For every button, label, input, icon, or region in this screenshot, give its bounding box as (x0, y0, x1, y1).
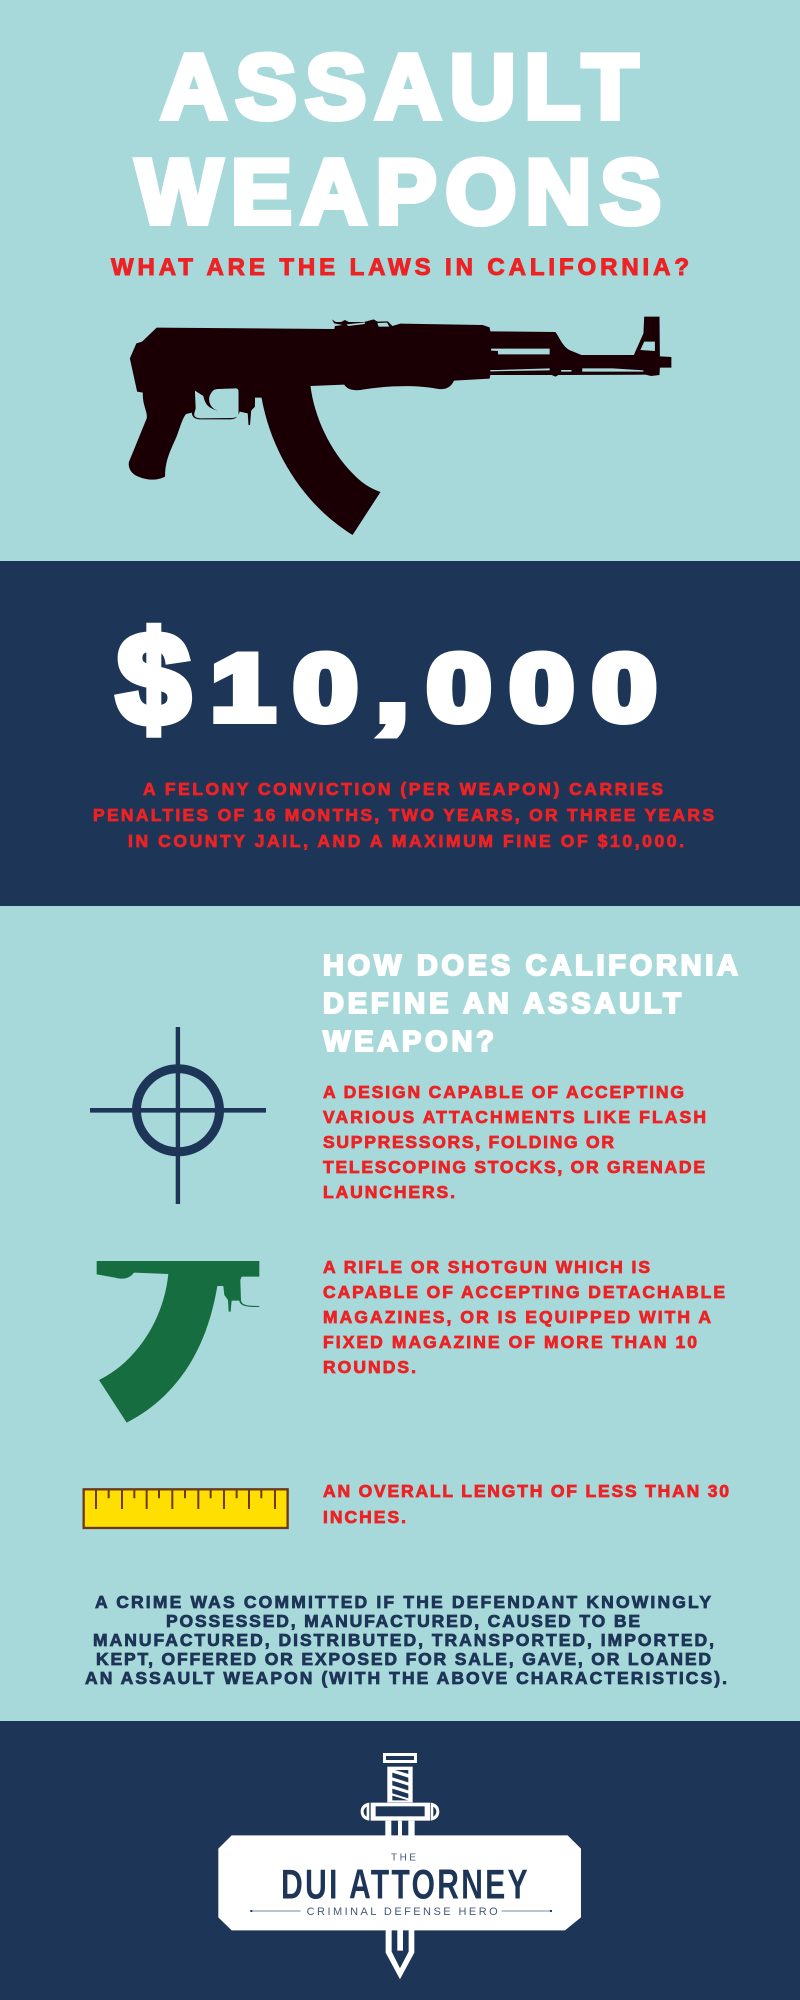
icon: sword blade tip (386, 1929, 414, 1979)
fine description: IN COUNTY JAIL, AND A MAXIMUM FINE OF $10,000. (128, 831, 684, 851)
text: attachments (323, 1082, 706, 1202)
text: attachments: LAUNCHERS. (323, 1182, 455, 1202)
fine description: PENALTIES OF 16 MONTHS, TWO YEARS, OR THREE YEARS (93, 805, 714, 825)
icon: sword hilt (361, 1753, 439, 1837)
section heading: WEAPON? (323, 1026, 494, 1058)
big number: $ (117, 605, 190, 752)
text: attachments: SUPPRESSORS, FOLDING OR (323, 1132, 614, 1152)
text: length: AN OVERALL LENGTH OF LESS THAN 30 (323, 1481, 729, 1501)
subtitle: WHAT ARE THE LAWS IN CALIFORNIA? (111, 254, 689, 281)
icon: ruler (84, 1489, 288, 1528)
text: magazines: A RIFLE OR SHOTGUN WHICH IS (323, 1257, 650, 1277)
logo plaque (218, 1835, 581, 1930)
text: magazines: FIXED MAGAZINE OF MORE THAN 10 (323, 1332, 697, 1352)
section heading: HOW DOES CALIFORNIA (323, 950, 738, 982)
text: attachments: TELESCOPING STOCKS, OR GRENADE (323, 1157, 705, 1177)
fine description: A FELONY CONVICTION (PER WEAPON) CARRIES (143, 779, 663, 799)
text: magazines: MAGAZINES, OR IS EQUIPPED WITH A (323, 1307, 711, 1327)
title: WEAPONS (136, 142, 661, 243)
panel: footer (0, 1721, 800, 2000)
logo text: DUI ATTORNEY (281, 1861, 528, 1908)
crime paragraph: MANUFACTURED, DISTRIBUTED, TRANSPORTED, IMPORTED, (93, 1630, 714, 1650)
fine description (93, 779, 714, 851)
crime paragraph: AN ASSAULT WEAPON (WITH THE ABOVE CHARACTERISTICS). (85, 1668, 727, 1688)
title (136, 37, 661, 243)
crime paragraph: KEPT, OFFERED OR EXPOSED FOR SALE, GAVE, OR LOANED (96, 1649, 711, 1669)
text: length (323, 1481, 729, 1527)
logo text: CRIMINAL DEFENSE HERO (307, 1906, 498, 1918)
crime paragraph: A CRIME WAS COMMITTED IF THE DEFENDANT KNOWINGLY (95, 1592, 711, 1612)
text: magazines (323, 1257, 725, 1377)
crime paragraph (85, 1592, 727, 1688)
text: length: INCHES. (323, 1507, 406, 1527)
logo text (250, 1853, 552, 1918)
big number (117, 605, 656, 752)
crime paragraph: POSSESSED, MANUFACTURED, CAUSED TO BE (166, 1611, 640, 1631)
panel: definition (0, 906, 800, 1722)
text: magazines: CAPABLE OF ACCEPTING DETACHABLE (323, 1282, 725, 1302)
panel: header (0, 0, 800, 562)
icon: rifle silhouette (129, 317, 671, 535)
text: attachments: A DESIGN CAPABLE OF ACCEPTING (323, 1082, 684, 1102)
big number: 10,000 (211, 636, 656, 741)
text: attachments: VARIOUS ATTACHMENTS LIKE FLASH (323, 1107, 706, 1127)
logo text: THE (391, 1853, 416, 1864)
logo: dui attorney (218, 1753, 581, 1979)
icon: crosshair (90, 1027, 266, 1204)
text: magazines: ROUNDS. (323, 1357, 416, 1377)
icon: green magazine (97, 1261, 259, 1423)
section heading: DEFINE AN ASSAULT (323, 988, 681, 1020)
panel: fine (0, 561, 800, 907)
title: ASSAULT (161, 37, 638, 138)
section heading (323, 950, 738, 1058)
